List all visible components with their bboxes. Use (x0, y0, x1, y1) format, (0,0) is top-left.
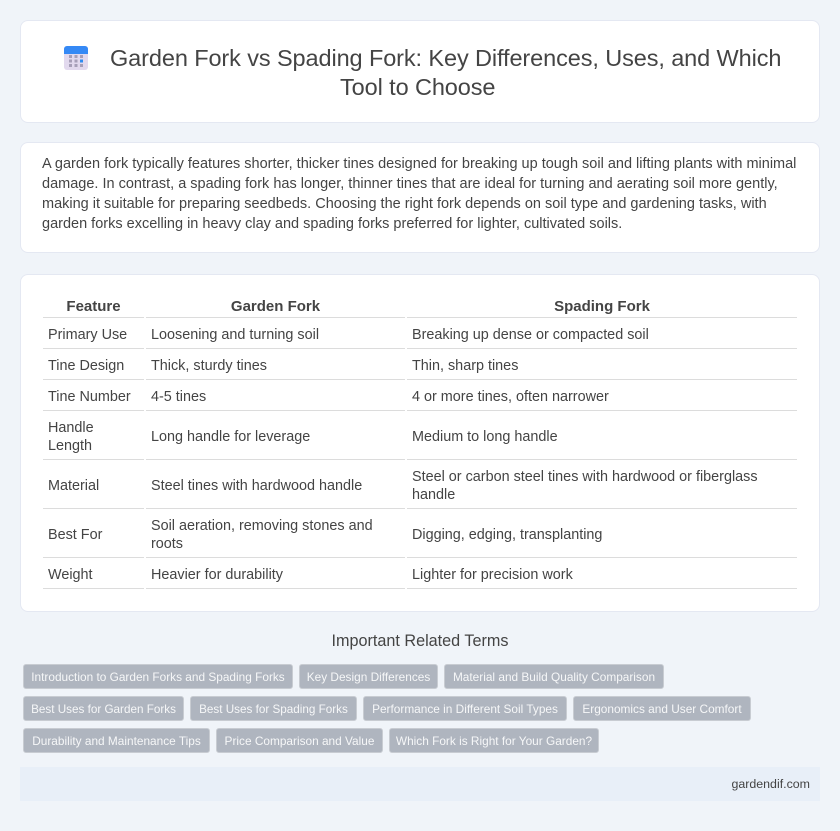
tag: Performance in Different Soil Types (372, 702, 558, 716)
table header: garden fork: Garden Fork (231, 298, 320, 315)
tag: Best Uses for Spading Forks (199, 703, 348, 716)
table header: spading fork: Spading Fork (554, 298, 650, 315)
icon: calendar (64, 46, 88, 70)
row: tine design: Thin, sharp tines (412, 358, 518, 374)
intro text (42, 156, 796, 232)
tag (23, 664, 293, 689)
row: weight: Weight (48, 567, 93, 583)
tag (444, 664, 664, 689)
footer credit: gardendif.com (731, 777, 810, 791)
row: handle length: Handle (48, 420, 94, 436)
row: material (48, 469, 758, 503)
row: best for: roots (151, 536, 183, 552)
intro text: garden forks excelling in heavy clay and spading forks preferred for lighter, cultivated soils. (42, 216, 622, 232)
title: Tool to Choose (340, 74, 495, 100)
comparison table panel (20, 274, 820, 612)
intro text: damage. In contrast, a spading fork has longer, thinner tines that are ideal for turning and aerating soil more gently, (42, 176, 778, 192)
tag (23, 696, 184, 721)
row: handle length: Long handle for leverage (151, 429, 310, 445)
row: tine number: 4 or more tines, often narrower (412, 389, 609, 405)
intro panel (20, 142, 820, 253)
footer bar (20, 767, 820, 801)
tag (389, 728, 599, 753)
comparison table (43, 317, 797, 589)
row: primary use: Primary Use (48, 327, 127, 343)
tag (363, 696, 567, 721)
tag (216, 728, 383, 753)
row: material: Steel or carbon steel tines with hardwood or fiberglass (412, 469, 758, 485)
related term tags (23, 664, 751, 753)
title (110, 45, 781, 100)
tag: Ergonomics and User Comfort (582, 702, 742, 716)
row: tine design (48, 358, 518, 374)
tag: Material and Build Quality Comparison (453, 670, 655, 684)
title: Garden Fork vs Spading Fork: Key Differences, Uses, and Which (110, 45, 781, 71)
intro text: A garden fork typically features shorter, thicker tines designed for breaking up tough soil and lifting plants with minimal (42, 156, 796, 172)
row: tine design: Thick, sturdy tines (151, 358, 267, 374)
related terms heading: Important Related Terms (332, 632, 508, 650)
tag: Key Design Differences (307, 670, 430, 684)
row: material: handle (412, 487, 455, 503)
tag: Durability and Maintenance Tips (32, 734, 201, 748)
row: tine design: Tine Design (48, 358, 124, 374)
row: material: Material (48, 478, 99, 494)
row: best for: Soil aeration, removing stones and (151, 518, 373, 534)
row: weight (48, 567, 573, 583)
row: tine number: 4-5 tines (151, 389, 206, 405)
header panel (20, 20, 820, 123)
row: best for: Digging, edging, transplanting (412, 527, 602, 543)
tag: Which Fork is Right for Your Garden? (396, 734, 592, 748)
row: tine number: Tine Number (48, 389, 131, 405)
tag (299, 664, 438, 689)
row: handle length: Length (48, 438, 92, 454)
row: tine number (48, 389, 609, 405)
row: weight: Heavier for durability (151, 567, 283, 583)
tag (23, 728, 210, 753)
row: primary use: Breaking up dense or compacted soil (412, 327, 649, 343)
row: weight: Lighter for precision work (412, 567, 573, 583)
row: best for (48, 518, 602, 552)
tag (190, 696, 357, 721)
row: best for: Best For (48, 527, 102, 543)
intro text: making it suitable for preparing seedbeds. Choosing the right fork depends on soil type and gardening tasks, with (42, 196, 767, 212)
tag: Price Comparison and Value (225, 734, 374, 748)
tag: Best Uses for Garden Forks (31, 703, 176, 716)
row: primary use: Loosening and turning soil (151, 327, 319, 343)
row: primary use (48, 327, 649, 343)
row: handle length (48, 420, 558, 454)
table header: feature: Feature (66, 298, 121, 315)
row: handle length: Medium to long handle (412, 429, 558, 445)
tag (573, 696, 751, 721)
row: material: Steel tines with hardwood handle (151, 478, 362, 494)
tag: Introduction to Garden Forks and Spading Forks (31, 670, 285, 684)
